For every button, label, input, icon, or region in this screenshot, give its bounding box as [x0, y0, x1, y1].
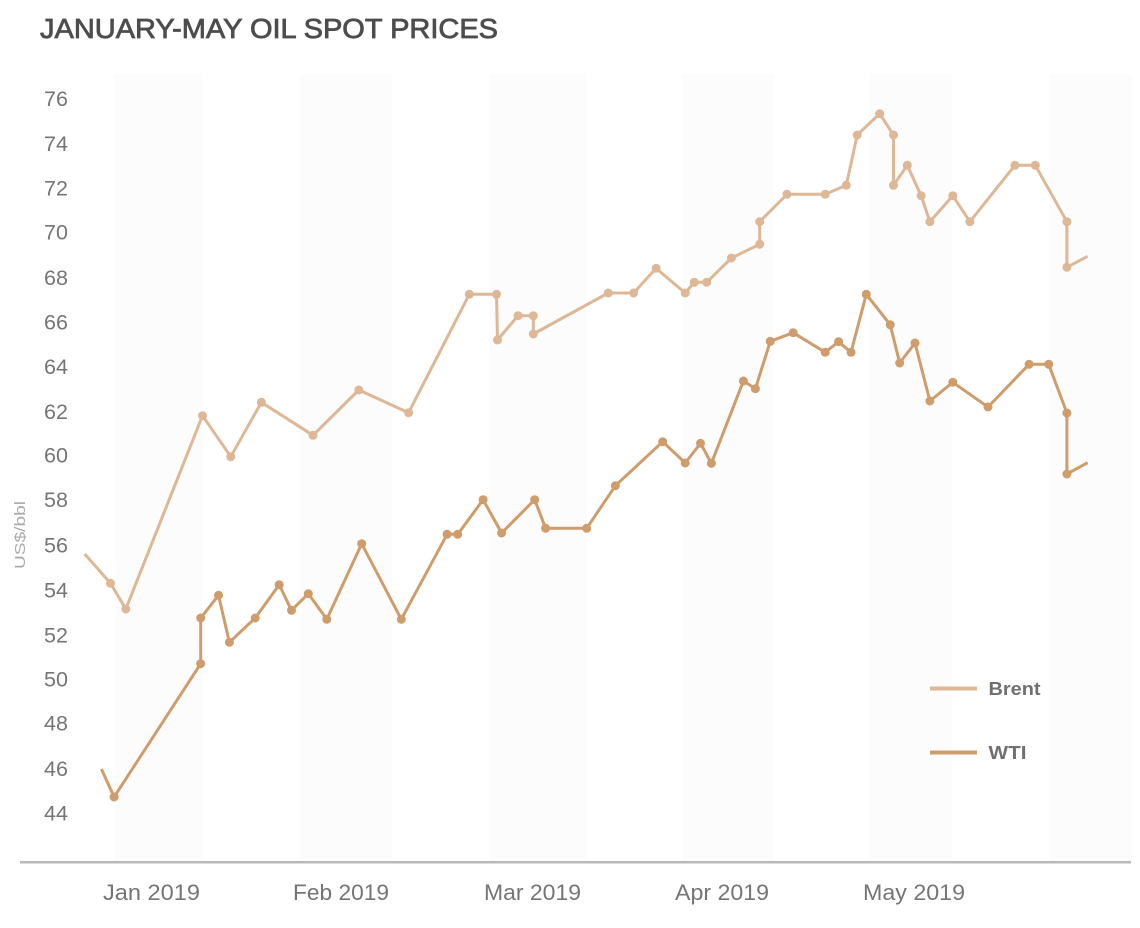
x axis labels [103, 880, 965, 905]
y axis labels: 52 [44, 624, 68, 648]
y axis labels: 58 [44, 488, 68, 512]
y axis labels: 56 [44, 534, 68, 558]
y axis labels: 54 [44, 578, 68, 602]
legend item: WTI: WTI [988, 743, 1026, 763]
x axis labels: Mar 2019 [484, 880, 581, 905]
y axis labels: 46 [44, 757, 68, 781]
y axis labels: 44 [44, 802, 68, 826]
y axis labels: 76 [44, 87, 68, 111]
y axis labels: 68 [44, 266, 68, 290]
alternating month bands [114, 74, 1132, 861]
y axis title: US$/bbl [12, 501, 29, 569]
x axis labels: May 2019 [863, 880, 965, 905]
series: Brent [85, 109, 1088, 613]
y axis labels [44, 87, 68, 826]
y axis labels: 64 [44, 355, 68, 379]
series: WTI [101, 290, 1088, 802]
y axis labels: 74 [44, 132, 68, 156]
y axis labels: 60 [44, 444, 68, 468]
x axis labels: Feb 2019 [293, 880, 389, 905]
y axis labels: 70 [44, 220, 68, 244]
x axis labels: Jan 2019 [103, 880, 200, 905]
y axis labels: 48 [44, 712, 68, 736]
y axis labels: 66 [44, 310, 68, 334]
title: JANUARY-MAY OIL SPOT PRICES [40, 13, 498, 44]
legend [930, 679, 1040, 763]
x axis line [20, 861, 1131, 864]
y axis labels: 72 [44, 176, 68, 200]
legend item: Brent: Brent [988, 679, 1040, 699]
y axis labels: 50 [44, 668, 68, 692]
x axis labels: Apr 2019 [675, 880, 769, 905]
y axis labels: 62 [44, 400, 68, 424]
